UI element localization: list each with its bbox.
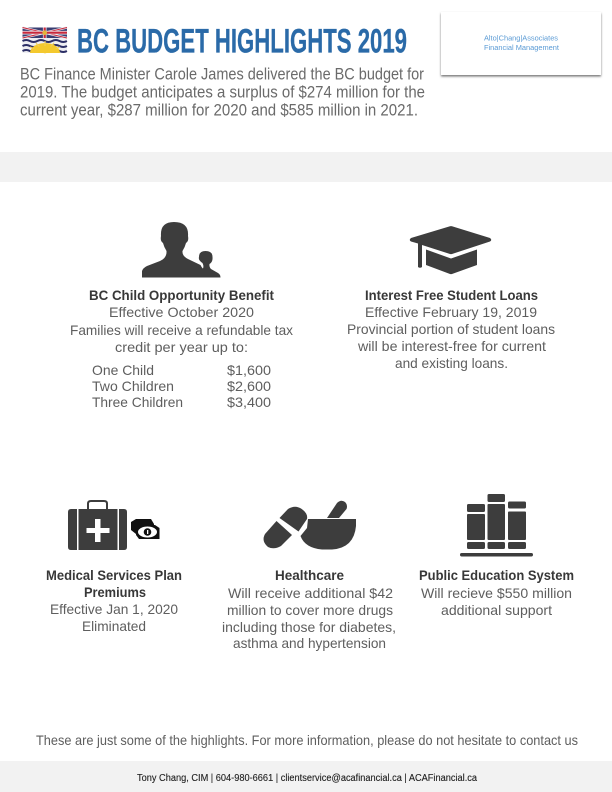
- panel: Public Education System: Public Education System: [419, 567, 574, 583]
- panel: Public Education System: additional support: [441, 602, 552, 618]
- panel: Public Education System: [419, 567, 574, 618]
- panel: BC Child Opportunity Benefit: Families will receive a refundable tax: [70, 322, 293, 338]
- panel: Interest Free Student Loans: [347, 287, 555, 371]
- panel: BC Child Opportunity Benefit: Effective October 2020: [109, 304, 254, 320]
- intro text: BC Finance Minister Carole James delivered the BC budget for: [20, 66, 424, 84]
- icon: graduation cap: [410, 226, 491, 274]
- icon: BC flag: [22, 28, 67, 53]
- icon: books: [460, 494, 533, 556]
- panel: BC Child Opportunity Benefit: credit per year up to:: [115, 339, 248, 355]
- panel: Medical Services Plan Premiums: Medical Services Plan: [46, 567, 182, 583]
- title: BC BUDGET HIGHLIGHTS 2019: [77, 22, 407, 60]
- panel: BC Child Opportunity Benefit: BC Child Opportunity Benefit: [89, 287, 274, 303]
- panel: Interest Free Student Loans: and existing loans.: [395, 355, 508, 371]
- logo box: Financial Management: [484, 45, 559, 52]
- panel: Healthcare: including those for diabetes,: [222, 619, 396, 635]
- panel: Interest Free Student Loans: will be interest-free for current: [357, 338, 546, 354]
- icon: parent and child: [142, 222, 220, 278]
- panel: Medical Services Plan Premiums: Premiums: [84, 584, 146, 600]
- panel: Healthcare: Will receive additional $42: [228, 585, 393, 601]
- panel: BC Child Opportunity Benefit: [70, 287, 293, 410]
- panel: Interest Free Student Loans: Effective February 19, 2019: [365, 304, 537, 320]
- icon: banknotes: [131, 519, 160, 539]
- panel: BC Child Opportunity Benefit: Three Children: [92, 394, 183, 410]
- footer band: [0, 761, 612, 792]
- panel: Healthcare: million to cover more drugs: [227, 602, 393, 618]
- logo box: Alto|Chang|Associates: [484, 36, 559, 42]
- panel: Interest Free Student Loans: Interest Free Student Loans: [365, 287, 538, 303]
- panel: Medical Services Plan Premiums: Eliminated: [82, 618, 146, 634]
- panel: Healthcare: [222, 567, 396, 651]
- intro text: current year, $287 million for 2020 and $585 million in 2021.: [20, 102, 418, 120]
- panel: Healthcare: asthma and hypertension: [233, 635, 386, 651]
- icon: medical case: [68, 501, 127, 550]
- panel: Public Education System: Will recieve $550 million: [421, 585, 572, 601]
- logo box: [441, 12, 601, 75]
- intro text: [20, 66, 425, 120]
- panel: BC Child Opportunity Benefit: $1,600: [227, 362, 271, 378]
- panel: Healthcare: Healthcare: [275, 567, 344, 583]
- panel: BC Child Opportunity Benefit: Two Children: [92, 378, 174, 394]
- panel: Medical Services Plan Premiums: [46, 567, 182, 634]
- icon: mortar and pill: [264, 501, 356, 550]
- grey band: [0, 152, 612, 182]
- intro text: 2019. The budget anticipates a surplus of $274 million for the: [20, 84, 425, 102]
- panel: BC Child Opportunity Benefit: One Child: [92, 362, 154, 378]
- panel: BC Child Opportunity Benefit: $2,600: [227, 378, 271, 394]
- panel: Interest Free Student Loans: Provincial portion of student loans: [347, 321, 555, 337]
- panel: Medical Services Plan Premiums: Effective Jan 1, 2020: [50, 601, 178, 617]
- panel: BC Child Opportunity Benefit: $3,400: [227, 394, 271, 410]
- footer contact: Tony Chang, CIM | 604-980-6661 | clientservice@acafinancial.ca | ACAFinancial.ca: [137, 773, 477, 784]
